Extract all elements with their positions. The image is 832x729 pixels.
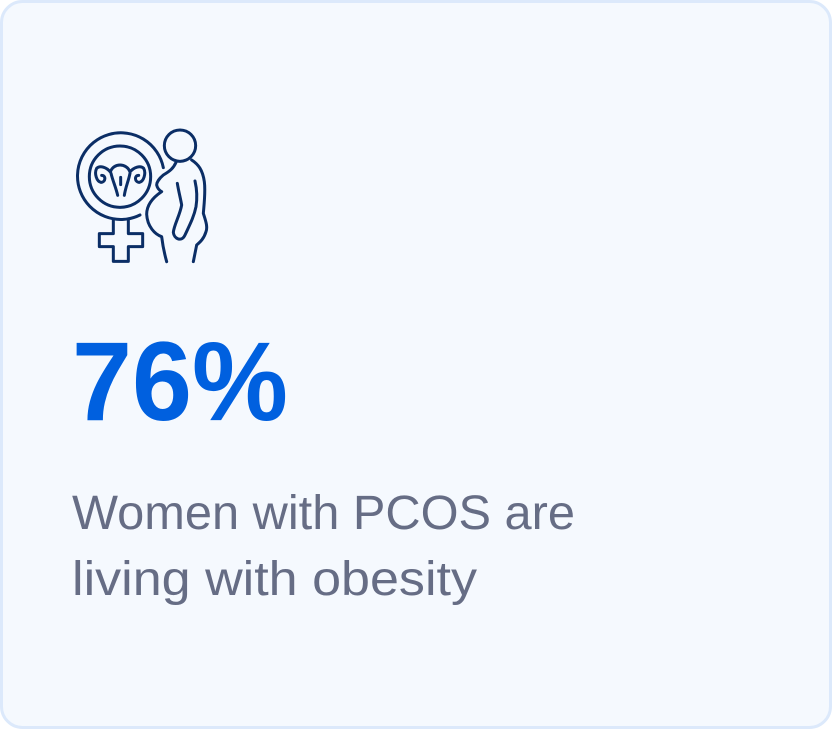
- icon part: outer ring of female symbol: [78, 133, 163, 219]
- statistic: 76%: 76%: [72, 319, 288, 444]
- icon part: arm: [173, 181, 197, 239]
- icon part: head: [164, 130, 196, 161]
- icon part: cross of female symbol: [99, 219, 143, 261]
- icon part: uterus: [96, 165, 145, 195]
- icon part: inner circle: [89, 146, 151, 207]
- description line 2: living with obesity: [72, 553, 477, 606]
- icon: female symbol with uterus and pregnant woman: [78, 130, 207, 262]
- description text: [72, 487, 575, 606]
- description line 1: Women with PCOS are: [72, 487, 575, 540]
- icon part: pregnant body outline: [147, 160, 207, 262]
